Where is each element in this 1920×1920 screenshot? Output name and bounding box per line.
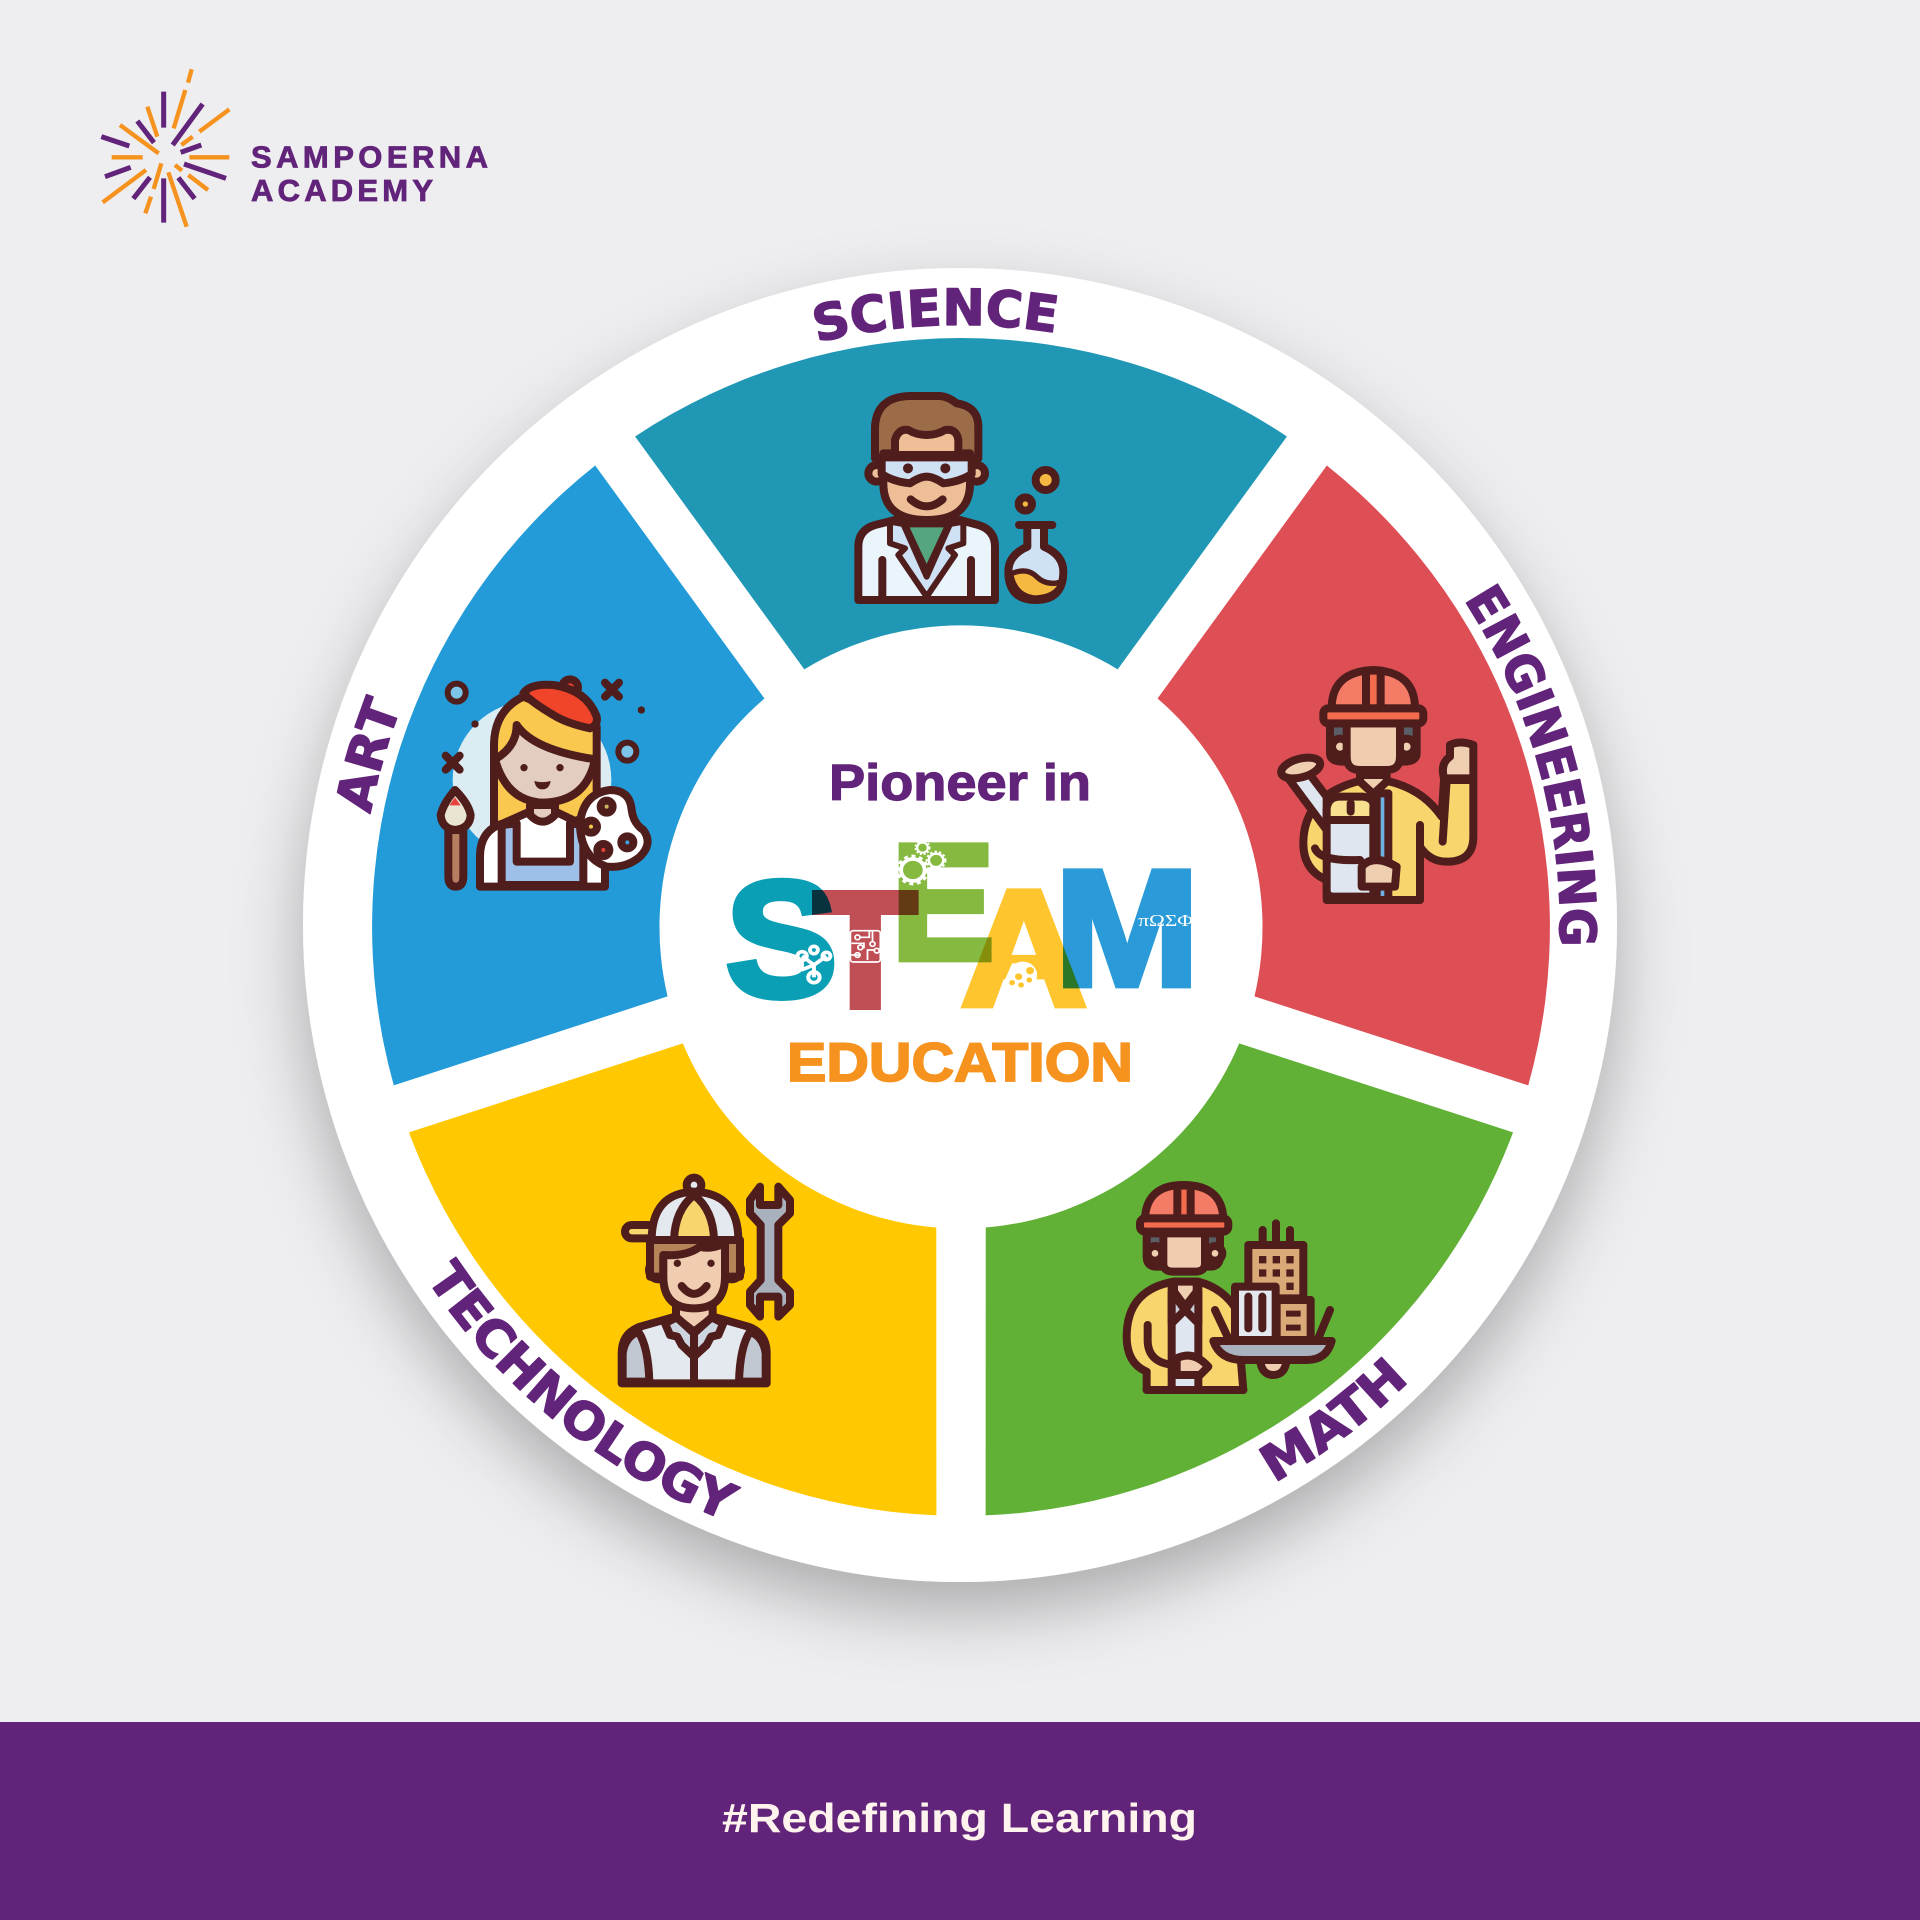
footer band — [0, 1722, 1920, 1920]
logo wordmark: ACADEMY — [251, 173, 433, 208]
icon: scientist — [858, 396, 1063, 600]
letter T: T — [814, 859, 917, 1042]
icon: technician with wrench — [622, 1178, 790, 1383]
label: TECHNOLOGY: TECHNOLOGY — [432, 1256, 742, 1516]
STEAM wordmark — [726, 809, 1199, 1042]
icon: dotted circle on A — [1001, 962, 1037, 988]
white wheel with shadow — [303, 268, 1617, 1582]
panel: math segment — [986, 1043, 1513, 1515]
label: ART: ART — [336, 694, 398, 814]
panel: technology segment — [409, 1043, 936, 1515]
icon: architect with model buildings — [1127, 1185, 1332, 1390]
panel: engineering segment — [1158, 466, 1550, 1085]
footer hashtag: #Redefining Learning — [722, 1795, 1197, 1841]
logo wordmark: SAMPOERNA — [251, 140, 488, 174]
icon: artist with palette and brush — [441, 679, 648, 887]
icon: molecule on S — [797, 946, 830, 983]
label: ENGINEERING: ENGINEERING — [1466, 583, 1598, 944]
icon: gears on E — [898, 841, 945, 884]
icon: circuit on T — [850, 931, 880, 962]
icon: starburst — [101, 69, 229, 227]
letter A: A — [961, 856, 1087, 1040]
label: SCIENCE: SCIENCE — [814, 288, 1058, 341]
icon: engineer with blueprints — [1279, 670, 1473, 900]
letter E: E — [891, 809, 995, 994]
letter M: M — [1055, 836, 1199, 1020]
heading: Pioneer in: Pioneer in — [829, 754, 1091, 811]
letter S: S — [726, 848, 838, 1032]
math symbols on M: πΩΣΦ — [1138, 911, 1193, 930]
panel: art segment — [372, 466, 764, 1085]
logo: Sampoerna Academy — [101, 69, 488, 227]
wheel segments — [372, 338, 1550, 1515]
label: MATH: MATH — [1258, 1356, 1407, 1482]
heading: EDUCATION: EDUCATION — [787, 1031, 1133, 1093]
panel: science segment — [635, 338, 1287, 669]
logo wordmark — [251, 140, 488, 208]
